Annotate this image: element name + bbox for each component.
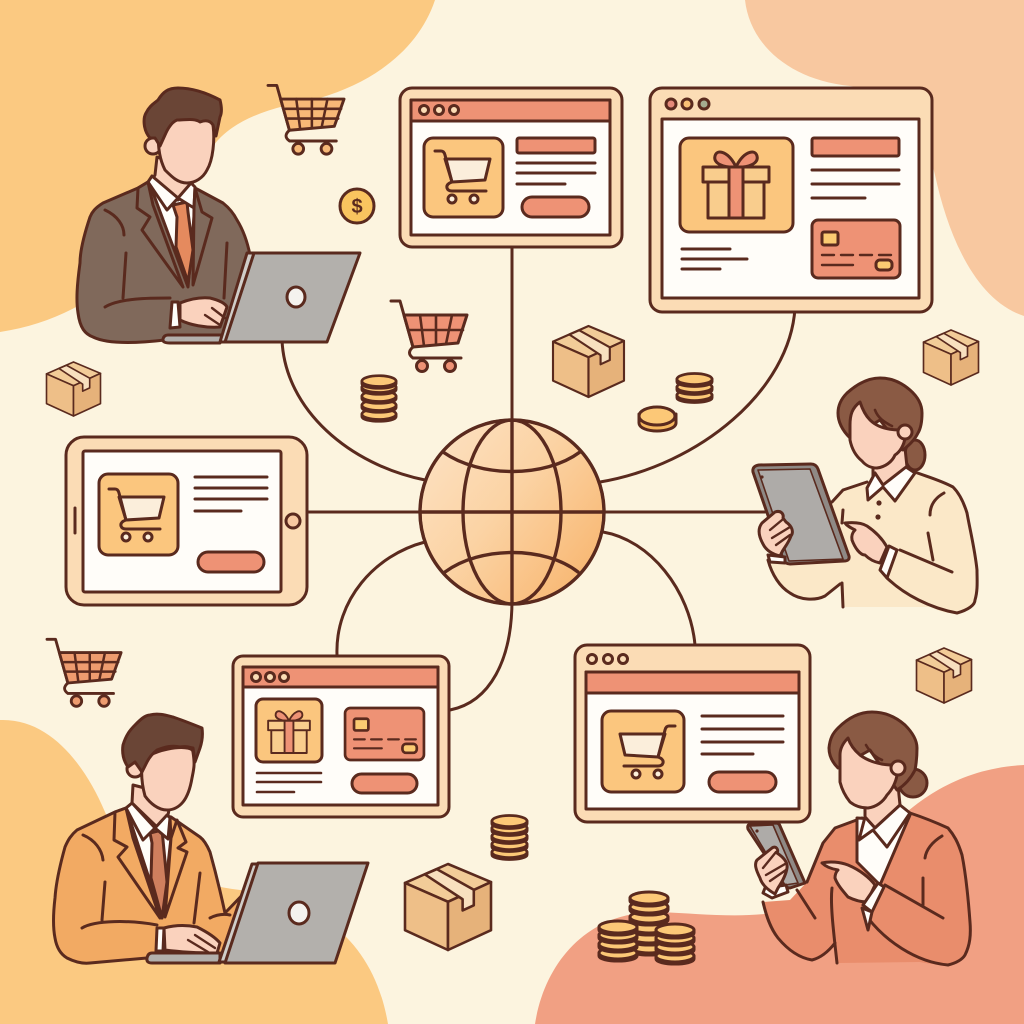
neck: [132, 785, 172, 827]
right cuff: [863, 883, 884, 912]
browser window: gift bottom left: [233, 656, 449, 817]
laptop base: [147, 953, 220, 963]
phone: [748, 823, 805, 888]
window dots: [252, 672, 288, 682]
white shirt: [857, 815, 910, 885]
face: [850, 402, 905, 468]
collar: [126, 803, 170, 840]
ear: [145, 138, 161, 154]
text lines: [702, 716, 783, 754]
buy button: [198, 552, 264, 572]
lapels: [114, 808, 187, 918]
bun: [905, 440, 925, 470]
cardigan outline: [763, 813, 970, 965]
buy button: [352, 774, 417, 793]
browser window: gift and card top right: [650, 88, 932, 312]
icon: dollar coin: $: [351, 196, 363, 218]
laptop screen: [225, 863, 368, 963]
hair: [123, 714, 202, 772]
laptop screen: [225, 253, 360, 342]
cart tile: [602, 711, 684, 792]
window dots: [588, 654, 628, 664]
icon: box bottom: [405, 864, 491, 950]
fingers: [188, 935, 215, 952]
header bar: [586, 672, 799, 693]
cuff: [170, 302, 180, 328]
text lines: [195, 477, 267, 511]
text lines: [257, 773, 321, 792]
buy button: [522, 197, 589, 217]
icon: dollar coin: [340, 189, 374, 223]
laptop logo: [287, 287, 305, 307]
fringe line: [875, 410, 892, 426]
globe: [420, 420, 604, 604]
shirt: [152, 187, 195, 287]
tie: [150, 830, 167, 918]
fingers: [205, 308, 225, 325]
title bar: [517, 138, 595, 153]
collar: [867, 467, 915, 501]
hair back: [838, 378, 922, 450]
icon: coin stack left of globe: [362, 376, 396, 421]
tablet storefront: [66, 437, 307, 605]
ear: [127, 761, 143, 777]
right hand: [822, 862, 875, 902]
suit lines: [105, 210, 227, 307]
background blob: bottom right: [535, 765, 1024, 1024]
collar: [148, 176, 195, 210]
laptop base: [163, 335, 222, 343]
person: businessman with laptop bottom left: [54, 714, 368, 963]
window dots: [666, 99, 709, 109]
face: [840, 738, 897, 808]
side mark: [74, 508, 76, 533]
icon: single coin: [639, 407, 676, 431]
text lines: [517, 163, 595, 184]
icon: coin pile bottom: [599, 892, 694, 964]
browser window: cart product top centre: [400, 88, 622, 247]
tie: [173, 202, 193, 282]
fringe line: [866, 745, 882, 760]
cart tile: [424, 138, 503, 217]
tablet: [753, 464, 849, 564]
window dots: [420, 106, 458, 114]
icon: box left: [46, 362, 100, 416]
sweater outline: [768, 472, 977, 613]
icon: cart top: [268, 85, 344, 154]
credit card: [345, 708, 424, 760]
hand: [180, 298, 227, 327]
network connector lines: [282, 245, 795, 710]
background blob: top left: [0, 0, 435, 332]
cardigan fill: [763, 813, 970, 965]
ear: [898, 425, 912, 439]
neck: [152, 157, 193, 200]
title bar: [812, 138, 899, 156]
collar: [859, 805, 910, 847]
caption lines: [682, 249, 747, 269]
background blob: top right: [745, 0, 1024, 316]
left fingers: [770, 520, 790, 545]
sweater fill: [768, 472, 977, 613]
person: woman with phone bottom right: [748, 712, 970, 965]
icon: cart left: [47, 639, 121, 706]
bun: [899, 769, 927, 797]
text lines: [812, 170, 899, 198]
suit: [77, 182, 250, 342]
neck: [873, 448, 907, 487]
icon: coin stack right of globe: [677, 374, 712, 402]
left hand: [756, 847, 787, 894]
hair back: [829, 712, 917, 790]
person: woman with tablet right: [753, 378, 977, 613]
icon: box lower right: [916, 648, 972, 703]
header bar: [243, 667, 438, 687]
person: businessman with laptop top left: [77, 88, 360, 343]
laptop logo: [289, 902, 309, 924]
gift tile: [256, 699, 322, 762]
ear: [891, 761, 905, 775]
left hand: [759, 511, 792, 556]
icon: box centre: [553, 326, 624, 397]
icon: coin stack lower centre: [492, 816, 527, 859]
cuff: [768, 555, 785, 563]
neck: [865, 785, 900, 828]
sweater buttons: [875, 500, 882, 520]
cart tile: [99, 474, 178, 555]
gift tile: [680, 138, 793, 232]
hand: [164, 926, 220, 953]
left fingers: [763, 852, 786, 881]
face: [142, 748, 194, 810]
shirt tail: [862, 908, 872, 930]
hair: [144, 88, 222, 146]
cuff: [156, 928, 164, 951]
home button: [286, 514, 300, 528]
browser window: cart bottom right: [575, 645, 810, 822]
icon: cart middle: [391, 301, 467, 372]
header bar: [411, 100, 610, 121]
suit: [54, 808, 252, 963]
icon: box top right: [924, 330, 978, 385]
lapels: [137, 182, 212, 287]
right hand: [845, 523, 887, 563]
background blob: bottom left: [0, 720, 388, 1024]
face: [158, 117, 214, 183]
suit lines: [82, 835, 230, 928]
shirt: [130, 818, 171, 918]
laptop hinge strip: [220, 253, 256, 342]
right cuff: [880, 546, 897, 578]
credit card: [812, 220, 900, 278]
buy button: [709, 772, 776, 792]
cuff: [763, 885, 788, 898]
laptop hinge strip: [219, 864, 262, 962]
